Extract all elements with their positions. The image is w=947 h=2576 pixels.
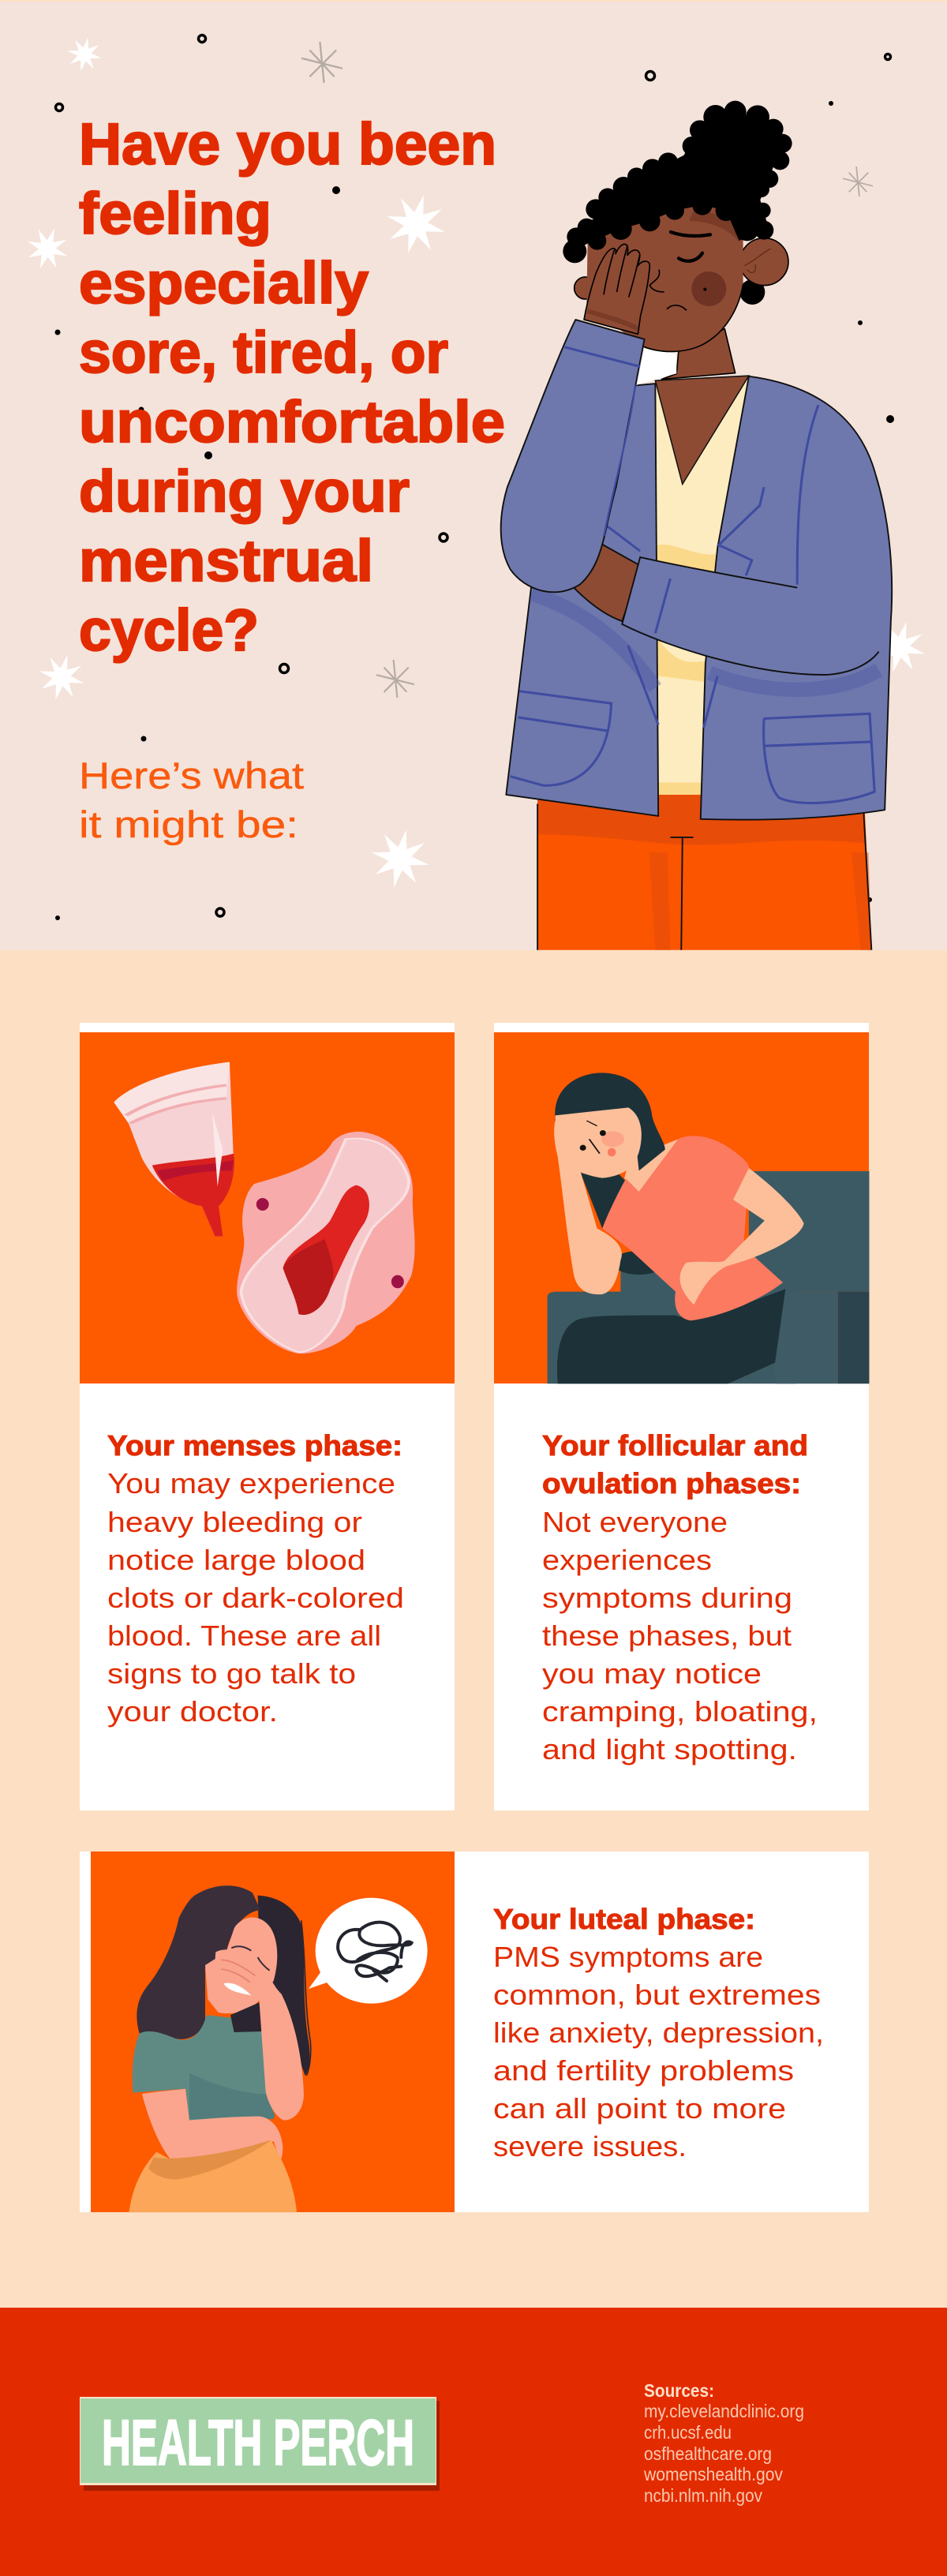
logo: Health Perch: HEALTH PERCH (102, 2407, 414, 2479)
text: follicular and ovulation phases: ovulation phases: (542, 1467, 801, 1500)
panel: footer (0, 2308, 947, 2576)
text: follicular and ovulation phases: cramping, bloating, (542, 1695, 818, 1728)
sources: crh.ucsf.edu (644, 2422, 732, 2443)
text: luteal phase: like anxiety, depression, (493, 2016, 824, 2049)
title: uncomfortable (79, 389, 505, 455)
text: menses phase: your doctor. (107, 1695, 278, 1728)
subtitle (79, 754, 304, 845)
menstrual cup (114, 1062, 234, 1237)
title: during your (79, 459, 410, 524)
text: follicular and ovulation phases: symptoms during (542, 1582, 792, 1614)
illustration: woman on sofa (548, 1073, 869, 1383)
sources: ncbi.nlm.nih.gov (644, 2485, 762, 2506)
illustration: woman crying with speech bubble (129, 1885, 428, 2212)
text: menses phase: signs to go talk to (107, 1657, 356, 1690)
title: especially (79, 250, 369, 316)
panel: luteal phase card (80, 1852, 869, 2212)
illustration: menstrual cup and pad (114, 1062, 415, 1354)
title (79, 111, 505, 663)
sources: osfhealthcare.org (644, 2443, 772, 2464)
sanitary pad (237, 1132, 415, 1354)
text: luteal phase: can all point to more (493, 2092, 786, 2125)
panel: follicular and ovulation phases card (494, 1023, 869, 1810)
sources: Sources: (644, 2380, 714, 2401)
text: follicular and ovulation phases: and light spotting. (542, 1733, 797, 1765)
forearm (574, 542, 642, 621)
sources (643, 2380, 804, 2506)
speech bubble (309, 1898, 428, 2004)
jacket shading (531, 593, 879, 690)
sources: womenshealth.gov (643, 2464, 783, 2484)
title: menstrual (79, 528, 373, 593)
text: luteal phase: severe issues. (493, 2130, 687, 2162)
text: menses phase: notice large blood (107, 1544, 365, 1576)
text: follicular and ovulation phases (542, 1429, 818, 1765)
title: feeling (79, 181, 271, 246)
crossing sleeve (622, 557, 891, 675)
decorative stars and dots (20, 34, 931, 920)
text: follicular and ovulation phases: these phases, but (542, 1619, 792, 1652)
text: menses phase: You may experience (107, 1467, 395, 1500)
text: follicular and ovulation phases: experiences (542, 1544, 712, 1576)
panel: hero (0, 2, 947, 950)
text: luteal phase: and fertility problems (493, 2054, 794, 2087)
text: luteal phase: Your luteal phase: (493, 1903, 755, 1935)
head (563, 101, 792, 385)
jacket torso (506, 376, 892, 820)
text: menses phase: clots or dark-colored (107, 1582, 404, 1614)
text: menses phase (107, 1429, 404, 1728)
text: luteal phase: common, but extremes (493, 1979, 821, 2011)
sources: my.clevelandclinic.org (644, 2401, 804, 2421)
hair (563, 101, 792, 263)
text: menses phase: blood. These are all (107, 1619, 381, 1652)
subtitle: Here’s what (79, 754, 304, 796)
text: luteal phase (493, 1903, 824, 2162)
text: follicular and ovulation phases: Not everyone (542, 1506, 728, 1538)
title: cycle? (79, 597, 259, 663)
panel: menses phase card (80, 1023, 455, 1810)
pockets (511, 691, 874, 803)
text: follicular and ovulation phases: Your follicular and (542, 1429, 808, 1462)
hand (584, 244, 649, 334)
title: sore, tired, or (79, 320, 448, 385)
logo: Health Perch (80, 2397, 440, 2491)
text: menses phase: heavy bleeding or (107, 1506, 362, 1538)
text: follicular and ovulation phases: you may notice (542, 1657, 762, 1690)
illustration: woman holding her face (501, 101, 892, 950)
raised sleeve (501, 320, 645, 592)
subtitle: it might be: (79, 803, 298, 845)
text: luteal phase: PMS symptoms are (493, 1941, 763, 1973)
text: menses phase: Your menses phase: (107, 1429, 402, 1462)
title: Have you been (79, 111, 496, 177)
